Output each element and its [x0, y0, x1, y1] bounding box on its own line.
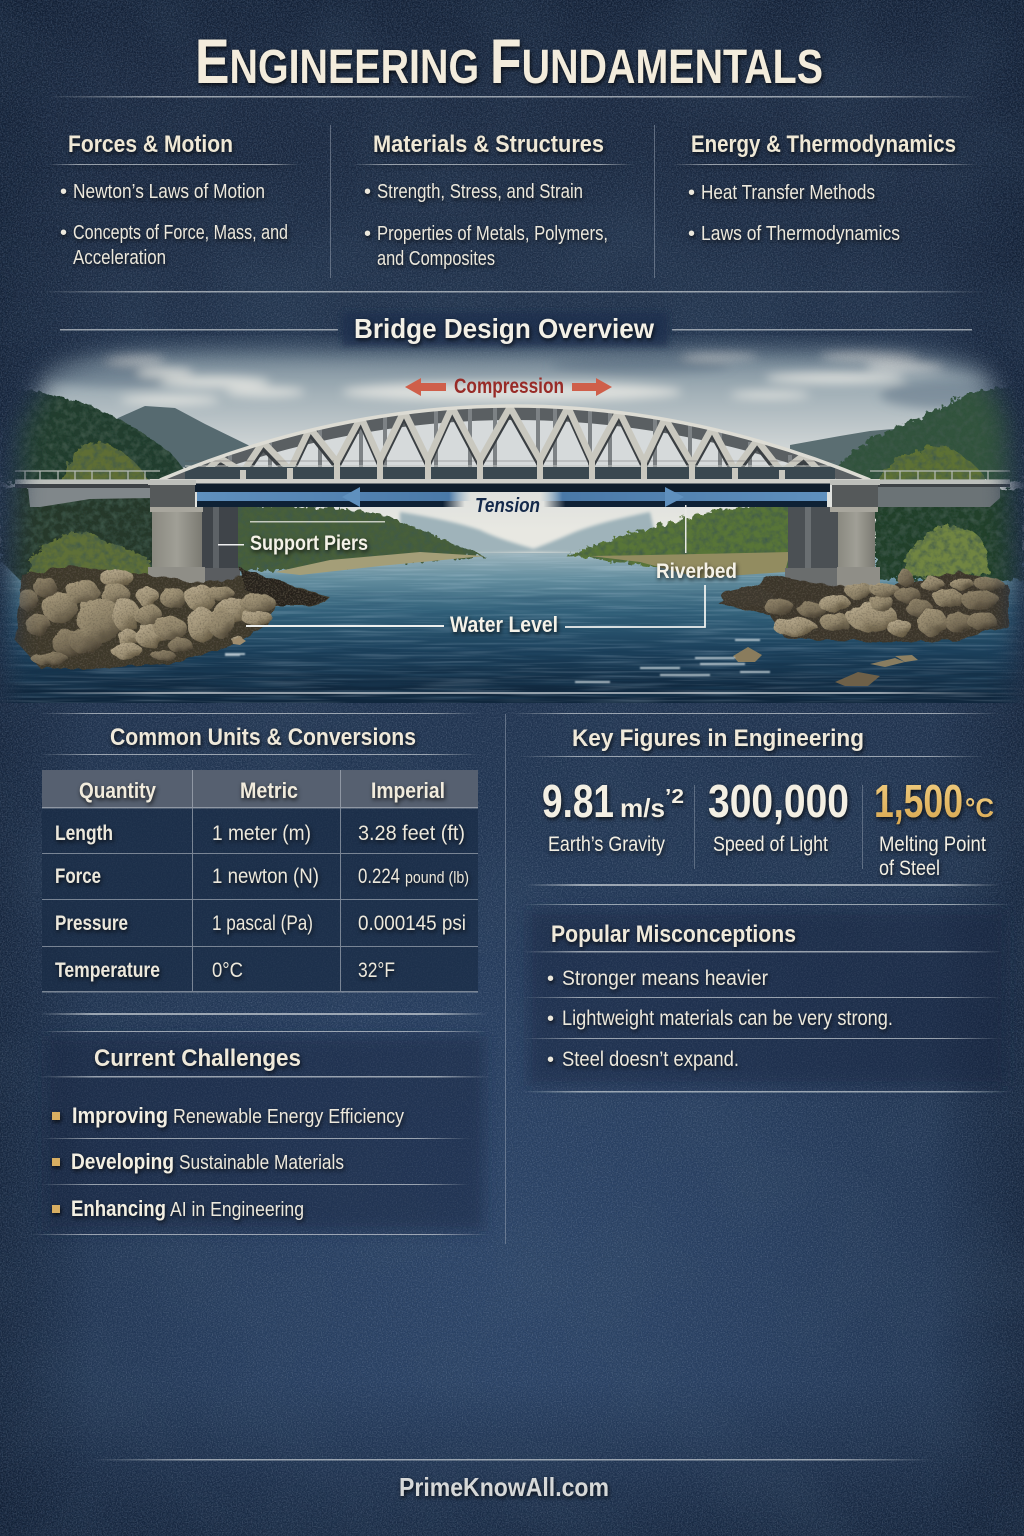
walkway railing	[185, 467, 835, 479]
figure: earth's gravity: ’2	[665, 786, 684, 808]
heading: current challenges: Current Challenges	[94, 1045, 301, 1072]
panel: popular misconceptions: Steel doesn’t expand.	[562, 1048, 739, 1071]
heading: energy and thermodynamics: Energy & Thermodynamics	[691, 131, 956, 158]
figure: melting point of steel	[874, 775, 994, 880]
panel: materials and structures	[352, 131, 634, 270]
footer: PrimeKnowAll.com	[399, 1472, 609, 1502]
panel: materials and structures: Properties of Metals, Polymers,	[377, 223, 608, 245]
table: Quantity	[79, 778, 157, 803]
figure: earth's gravity: 9.81	[542, 775, 614, 827]
heading: key figures: Key Figures in Engineering	[572, 725, 864, 752]
river stones and foam	[225, 637, 918, 686]
lower foliage left and right	[0, 488, 155, 582]
table: 1 newton (N)	[212, 865, 319, 888]
panel: energy and thermodynamics: •	[688, 182, 695, 204]
panel: materials and structures: •	[364, 181, 371, 203]
panel: forces and motion: •	[60, 181, 67, 203]
clouds	[50, 349, 1020, 409]
panel: current challenges: Sustainable Materials	[179, 1152, 344, 1174]
table: Length	[55, 822, 113, 845]
approach decks	[15, 480, 155, 484]
bridge structure	[15, 405, 1010, 590]
far valley hills	[400, 512, 660, 556]
figure: speed of light: Speed of Light	[713, 833, 828, 856]
panel: materials and structures: and Composites	[377, 248, 495, 270]
figure: earth's gravity: Earth’s Gravity	[548, 833, 665, 856]
table: pound (lb)	[405, 868, 469, 887]
table: 0.000145 psi	[358, 912, 466, 935]
panel: current challenges: Improving	[72, 1103, 168, 1128]
midground hills left	[225, 505, 485, 570]
panel: popular misconceptions: Lightweight materials can be very strong.	[562, 1007, 893, 1030]
panel: key figures in engineering	[510, 713, 1000, 880]
right rocks	[718, 570, 1008, 642]
tension band	[197, 487, 827, 507]
label: compression: Compression	[454, 375, 564, 398]
table: 0°C	[212, 959, 243, 982]
heading: common units: Common Units & Conversions	[110, 724, 416, 751]
panel: energy and thermodynamics: Heat Transfer Methods	[701, 182, 875, 204]
panel: current challenges: Renewable Energy Efficiency	[173, 1106, 404, 1128]
panel: current challenges: Enhancing	[71, 1196, 166, 1221]
title: ENGINEERING FUNDAMENTALS	[195, 27, 823, 97]
table	[42, 770, 478, 992]
panel: common units and conversions	[40, 713, 480, 992]
figure: melting point of steel: °C	[965, 793, 994, 823]
side railings	[15, 471, 1010, 480]
label: tension: Tension	[475, 495, 540, 517]
figure: melting point of steel: Melting Point	[879, 833, 986, 856]
upper lattice band	[167, 408, 862, 479]
panel: energy and thermodynamics: •	[688, 223, 695, 245]
figure: speed of light: 300,000	[708, 775, 849, 827]
panel: energy and thermodynamics	[672, 131, 977, 245]
label: compression	[405, 375, 612, 398]
panel: popular misconceptions: Stronger means heavier	[562, 967, 768, 990]
vertical posts	[228, 408, 792, 467]
section heading: bridge design overview: Bridge Design Overview	[354, 313, 654, 344]
table: Imperial	[371, 778, 445, 803]
table: 1 meter (m)	[212, 822, 311, 845]
label: water level	[246, 585, 705, 637]
heading: materials and structures: Materials & Structures	[373, 131, 604, 158]
left rocks	[15, 566, 330, 670]
bridge illustration	[0, 335, 1024, 703]
table: 0.224	[358, 865, 400, 888]
main deck	[150, 479, 880, 484]
heading: popular misconceptions: Popular Misconceptions	[551, 921, 796, 948]
panel: forces and motion: Concepts of Force, Mass, and	[73, 222, 288, 244]
distant mountains	[117, 406, 249, 468]
panel: forces and motion: •	[60, 222, 67, 244]
section heading: bridge design overview	[60, 312, 972, 346]
panel: popular misconceptions: •	[547, 1008, 554, 1030]
arch top chord	[160, 406, 870, 480]
table: Pressure	[55, 912, 128, 935]
panel: current challenges: Developing	[71, 1149, 174, 1174]
panel: energy and thermodynamics: Laws of Thermodynamics	[701, 223, 900, 245]
table: Temperature	[55, 959, 160, 982]
figure: earth's gravity	[542, 775, 684, 856]
table: 3.28 feet (ft)	[358, 822, 465, 845]
panel: popular misconceptions	[522, 904, 1012, 1092]
heading: forces and motion: Forces & Motion	[68, 131, 233, 158]
truss posts	[243, 458, 782, 479]
sky	[0, 335, 1024, 560]
table: Metric	[240, 778, 298, 803]
figure: earth's gravity: m/s	[620, 793, 665, 823]
label: water level: Water Level	[450, 612, 558, 637]
figure: melting point of steel: of Steel	[879, 857, 940, 880]
forest hill right	[838, 385, 1024, 482]
label: riverbed: Riverbed	[656, 560, 737, 583]
truss diagonals	[206, 408, 820, 467]
right pier	[785, 480, 880, 590]
panel: current challenges	[30, 1031, 490, 1235]
figure: melting point of steel: 1,500	[874, 775, 963, 827]
forest hill left	[0, 385, 195, 482]
panel: current challenges: AI in Engineering	[170, 1199, 304, 1221]
midground hills right	[566, 507, 788, 568]
panel: materials and structures: •	[364, 223, 371, 245]
left pier	[148, 480, 240, 586]
label: riverbed	[656, 505, 737, 583]
panel: materials and structures: Strength, Stress, and Strain	[377, 181, 583, 203]
panel: forces and motion: Acceleration	[73, 247, 166, 269]
panel: forces and motion	[48, 131, 300, 269]
panel: popular misconceptions: •	[547, 1049, 554, 1071]
truss interior	[236, 420, 836, 479]
table: 1 pascal (Pa)	[212, 912, 313, 935]
panel: popular misconceptions: •	[547, 968, 554, 990]
water	[0, 553, 1024, 703]
label: support piers: Support Piers	[250, 532, 368, 555]
table: 32°F	[358, 959, 395, 982]
table: Force	[55, 865, 101, 888]
panel: forces and motion: Newton’s Laws of Motion	[73, 181, 265, 203]
figure: speed of light	[708, 775, 849, 856]
